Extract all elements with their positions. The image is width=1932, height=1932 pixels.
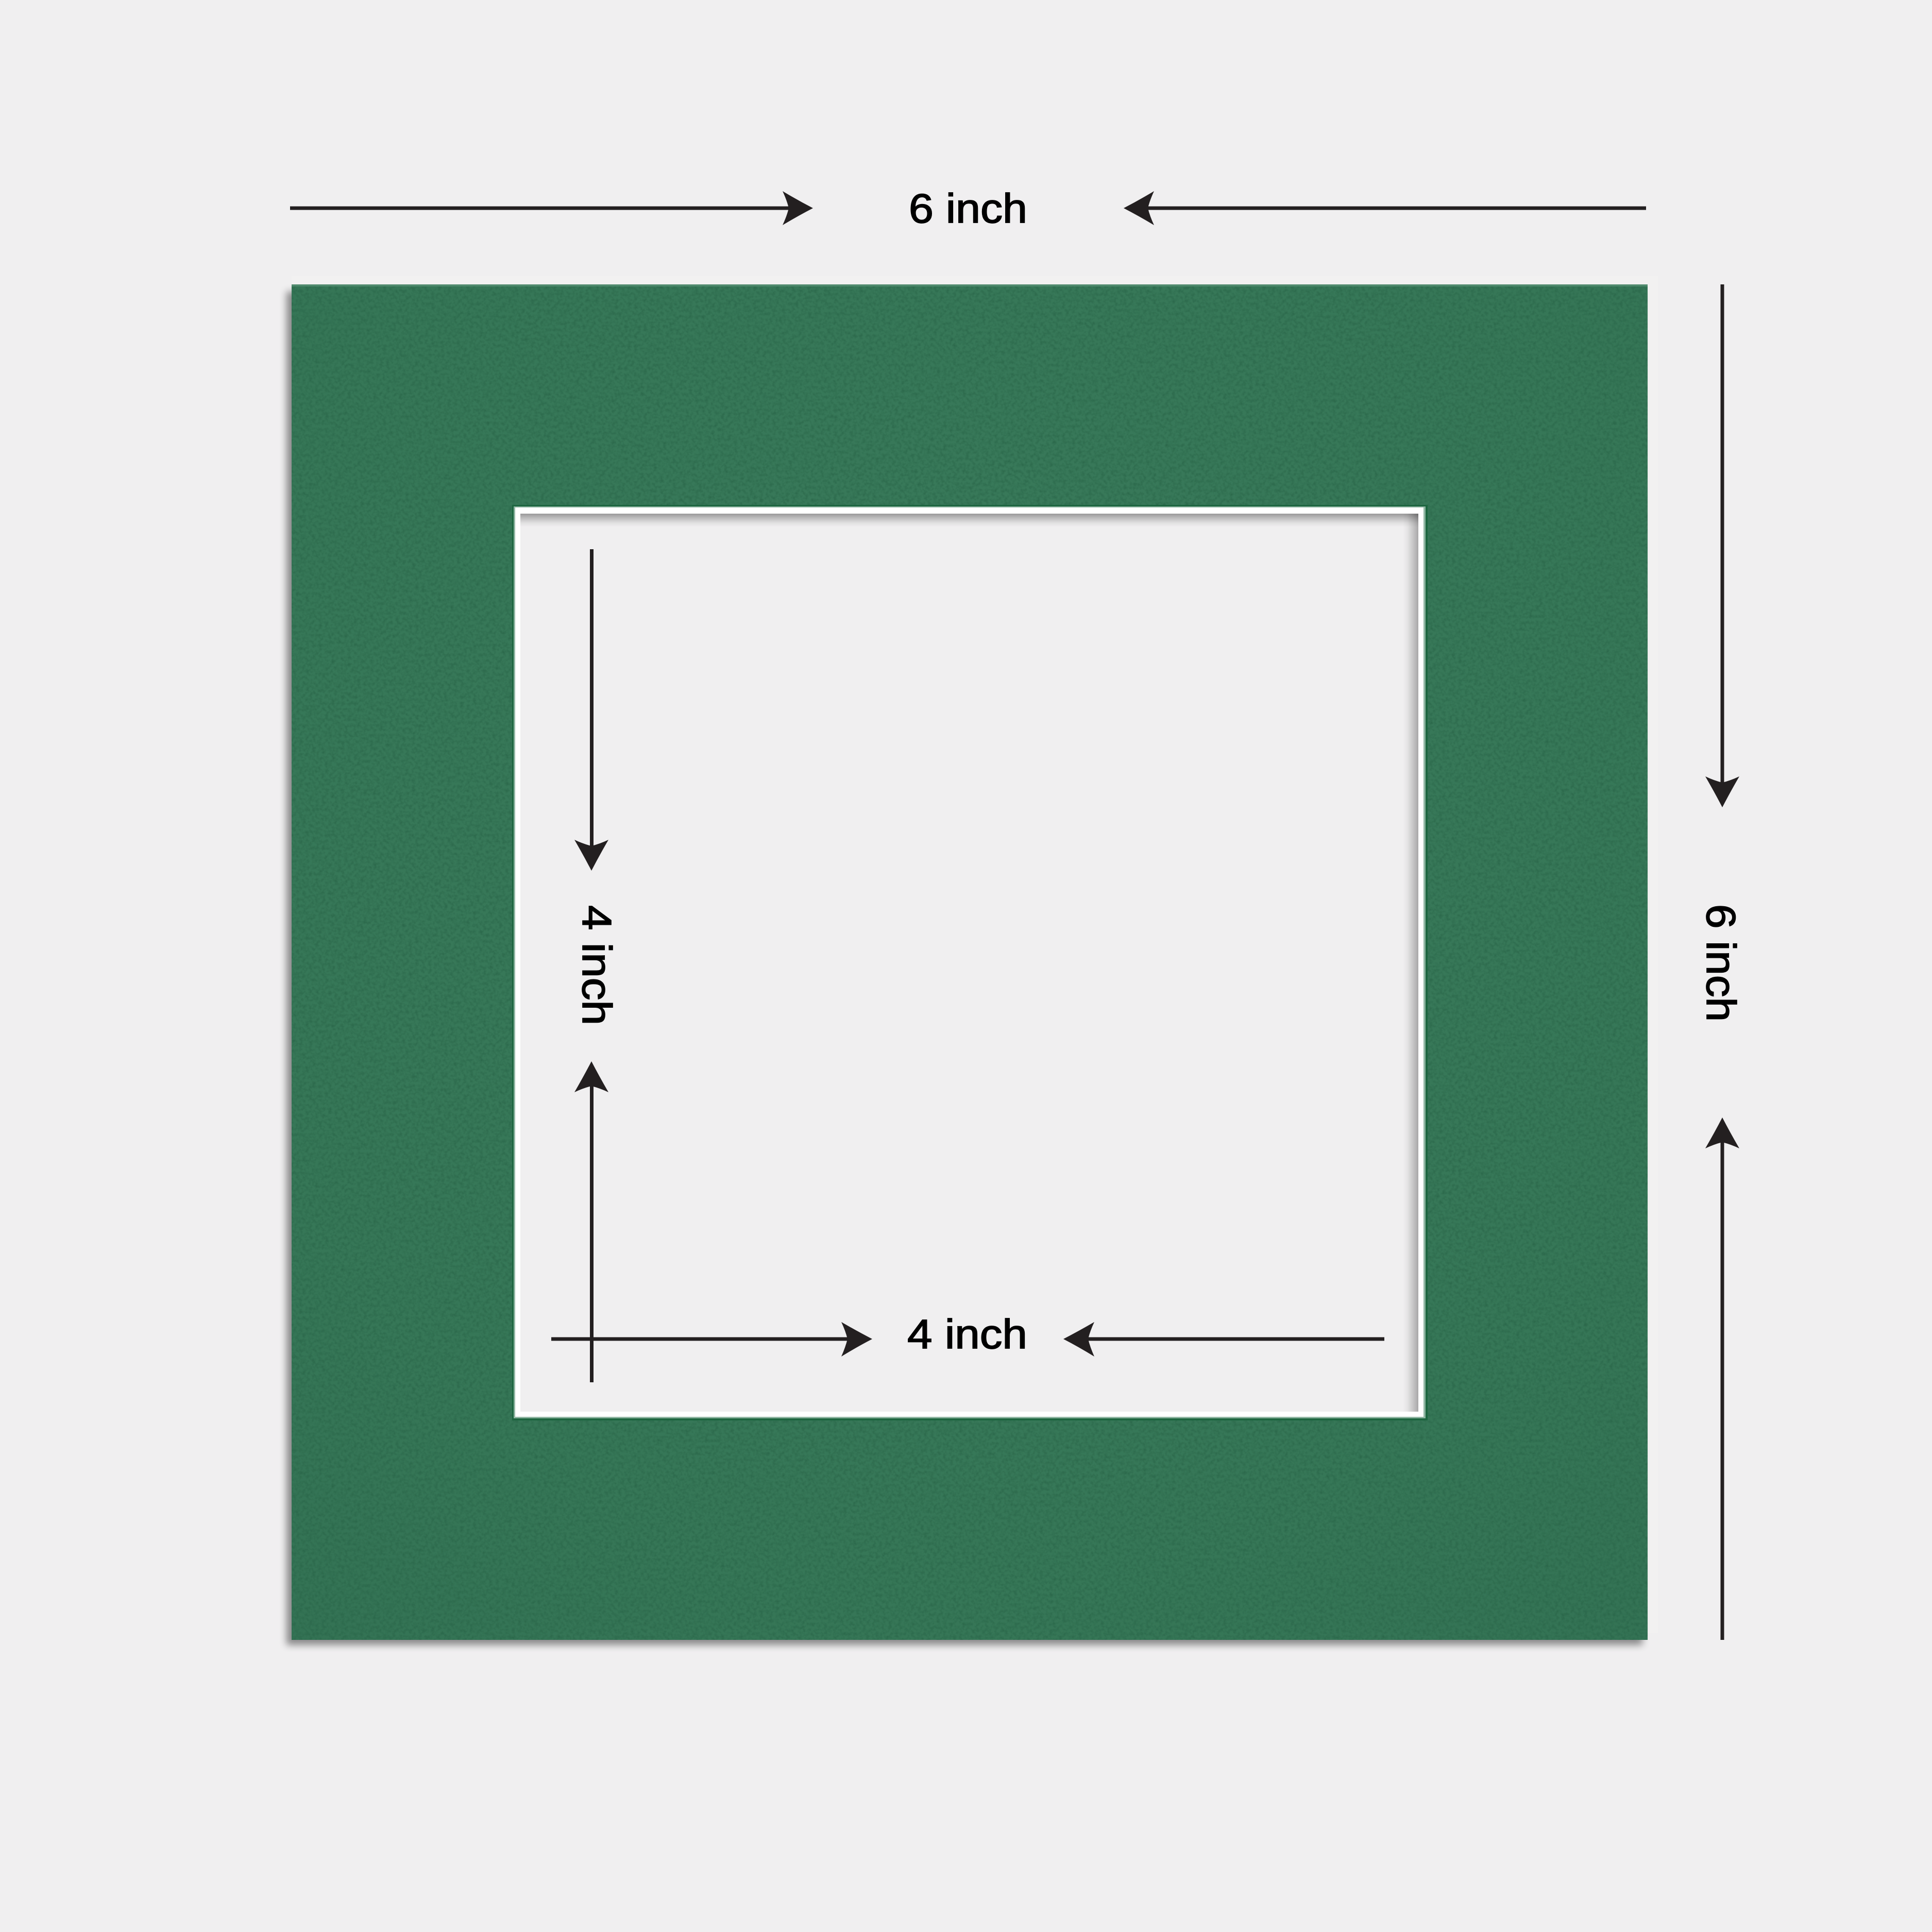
- dimension: opening width 4 inch: [551, 1311, 1384, 1357]
- arrow: inner left pointing up: [574, 1061, 608, 1382]
- arrow: right side pointing up: [1705, 1117, 1739, 1640]
- dimension: outer width 6 inch: [290, 185, 1646, 231]
- board surface: [292, 284, 1648, 1640]
- board drop shadow: [286, 292, 1642, 1645]
- arrow: top left pointing right: [290, 191, 813, 225]
- arrow: inner bottom pointing left: [1063, 1322, 1384, 1357]
- label: right 6 inch: 6 inch: [1698, 904, 1744, 1022]
- board light halo: [292, 276, 1658, 1633]
- label: inner left 4 inch: 4 inch: [574, 905, 620, 1025]
- window opening: [512, 505, 1428, 1420]
- dimension: opening height 4 inch: [574, 549, 620, 1382]
- arrow: right side pointing down: [1705, 284, 1739, 807]
- arrow: top right pointing left: [1124, 191, 1646, 225]
- arrow: inner bottom pointing right: [551, 1322, 872, 1357]
- arrow: inner left pointing down: [574, 549, 608, 871]
- dimension: outer height 6 inch: [1698, 284, 1744, 1640]
- label: inner bottom 4 inch: 4 inch: [907, 1311, 1027, 1357]
- panel: mat board: [286, 276, 1658, 1645]
- label: top 6 inch: 6 inch: [909, 185, 1027, 231]
